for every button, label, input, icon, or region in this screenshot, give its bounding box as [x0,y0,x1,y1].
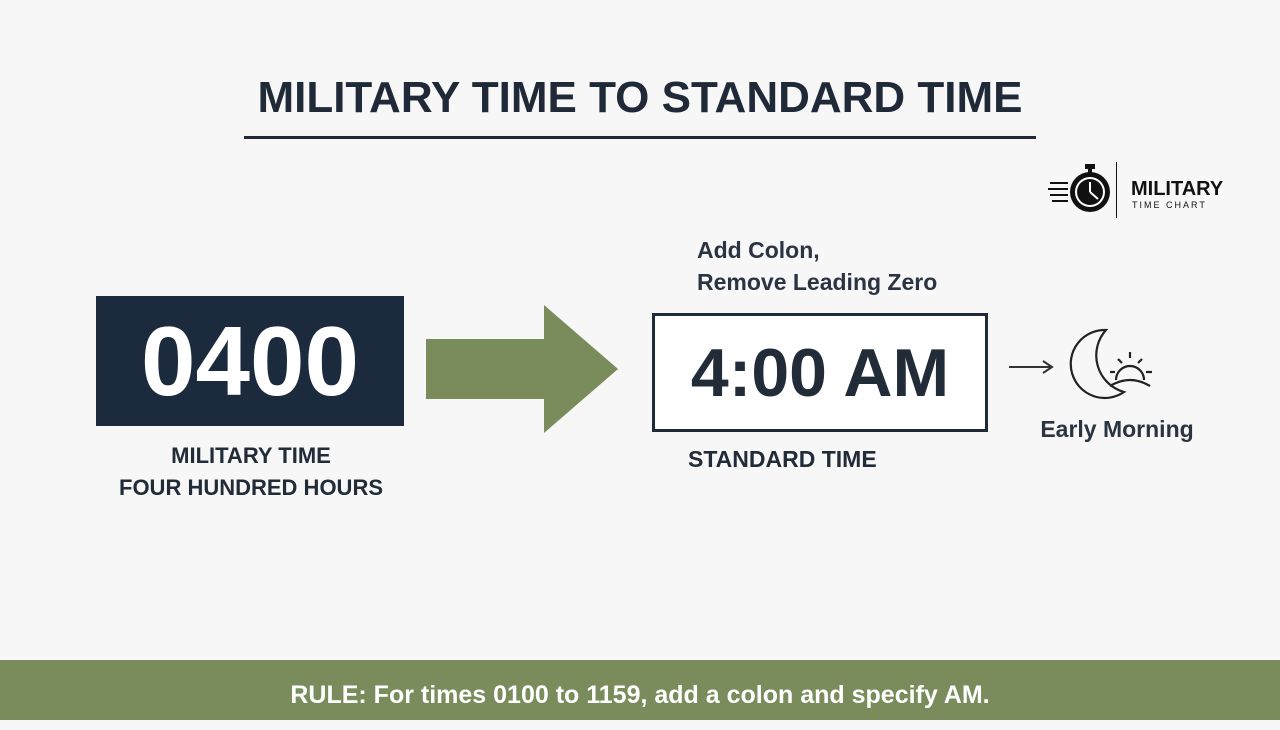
title: MILITARY TIME TO STANDARD TIME [257,73,1023,122]
military time label [119,443,383,500]
icon: moon and sun [1070,328,1152,400]
standard time box [652,313,988,432]
arrow: big green [426,305,618,433]
logo: TIME CHART [1132,200,1207,210]
rule bar [0,660,1280,720]
standard time box: 4:00 AM [691,335,949,411]
step note: Remove Leading Zero [697,269,937,295]
logo [1048,162,1223,218]
icon label: Early Morning [1040,416,1194,442]
title [244,70,1036,139]
military time label: MILITARY TIME [171,443,331,468]
step note: Add Colon, [697,237,820,263]
rule bar: RULE: For times 0100 to 1159, add a colon and specify AM. [290,681,990,709]
military time box: 0400 [141,306,359,416]
step note [697,237,937,295]
standard time label: STANDARD TIME [688,446,877,472]
military time label: FOUR HUNDRED HOURS [119,475,383,500]
military time box [96,296,404,426]
arrow: small [1009,360,1054,374]
logo: MILITARY [1131,178,1223,200]
